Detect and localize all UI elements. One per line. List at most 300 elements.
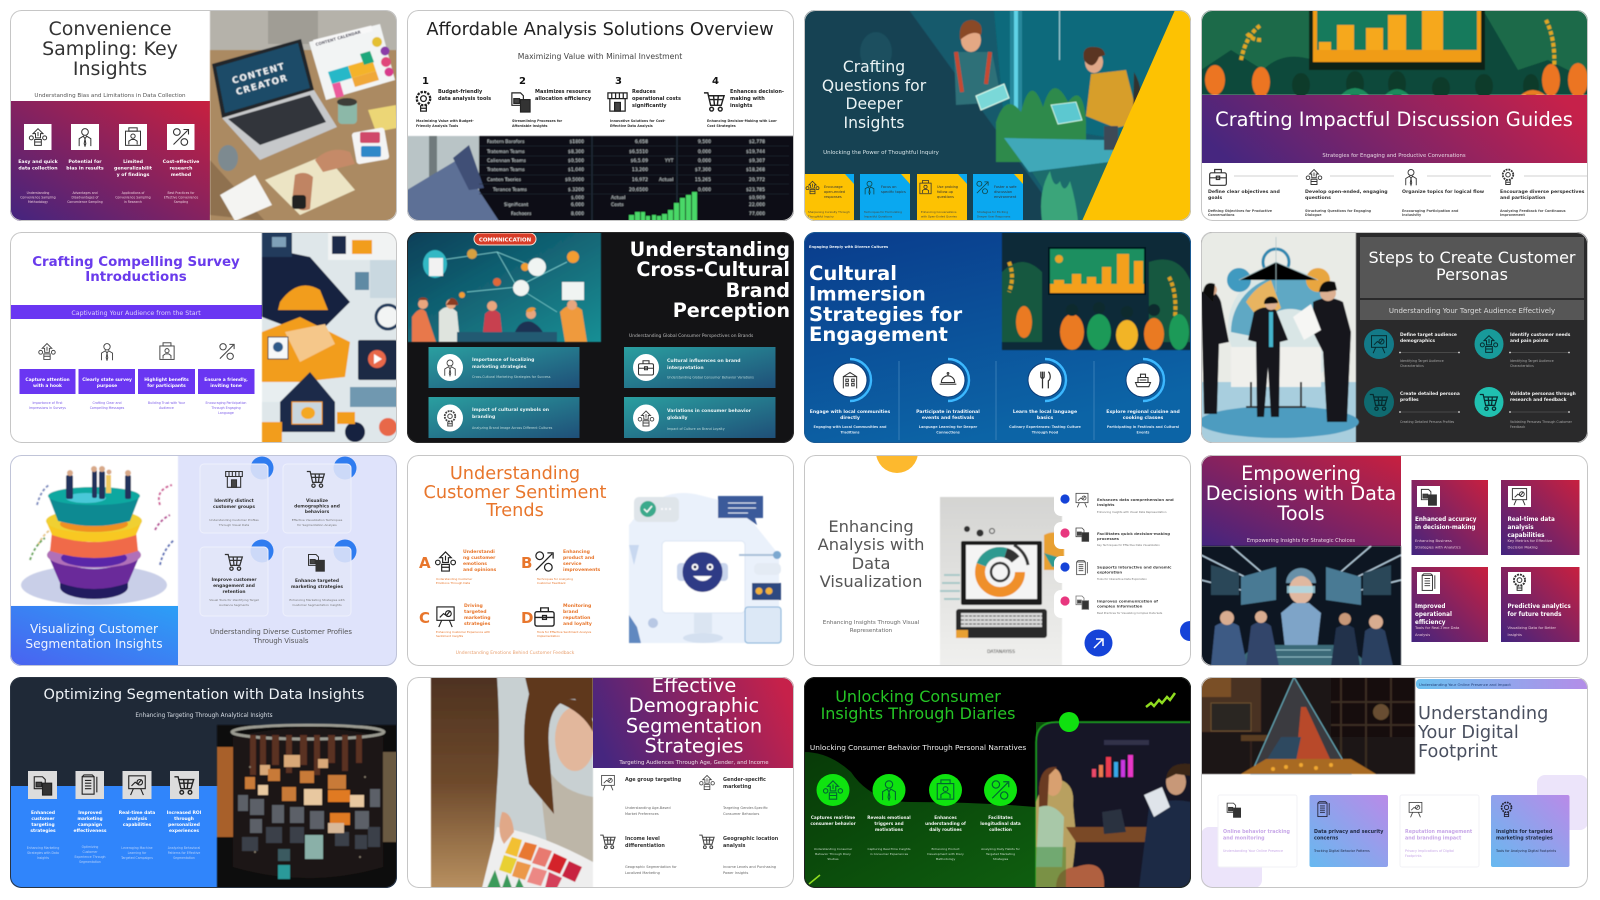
- communication pill: [474, 233, 536, 245]
- title: Insights: [73, 58, 147, 80]
- four segmentation items: analysis: [723, 843, 746, 849]
- four step columns: Learning for: [128, 851, 147, 855]
- four guide items: Improvement: [1500, 213, 1525, 217]
- four segmentation items: Geographic Segmentation for: [625, 865, 677, 869]
- A to D items: Understanding Customer: [436, 577, 473, 581]
- four segmentation items: Targeting Gender-Specific: [722, 806, 768, 810]
- image: financial table with analyst: 6,000: [571, 202, 584, 208]
- numbered steps: 1: [422, 76, 429, 87]
- four segmentation items: Age group targeting: [625, 777, 682, 783]
- four guide items: Conversations: [1208, 213, 1235, 217]
- image: financial table with analyst: 9,500: [698, 139, 711, 145]
- four purple steps: Importance of First: [32, 401, 63, 405]
- gradient title block: Targeting Audiences Through Age, Gender, and Income: [618, 760, 769, 766]
- title: Optimizing Segmentation with Data Insights: [44, 687, 364, 703]
- image: financial table with analyst: $1800: [569, 139, 584, 145]
- A to D items: Customer Feedback: [537, 581, 566, 585]
- four metric cards: Improved: [1415, 604, 1445, 610]
- four metric cards: Visualizing Data for Better: [1508, 626, 1557, 630]
- image: financial table with analyst: 15,265: [695, 177, 711, 183]
- four guide items: Encouraging Participation and: [1402, 209, 1459, 213]
- illustration: layered funnel with people: [10, 455, 178, 606]
- image: financial table with analyst: Fachoors: [511, 211, 532, 217]
- four feature cards: concerns: [1314, 836, 1338, 842]
- title: Understanding: [630, 238, 790, 261]
- image: financial table with analyst: $.3200: [568, 187, 584, 193]
- title: Affordable Analysis Solutions Overview: [426, 19, 774, 40]
- image: financial table with analyst: $,000: [571, 195, 584, 201]
- four green icons: Facilitates: [988, 815, 1013, 820]
- four persona steps: Identifying Target Audience: [1400, 359, 1444, 363]
- A to D items: and loyalty: [563, 621, 592, 627]
- title: Crafting: [843, 58, 905, 76]
- four purple steps: Audience: [159, 406, 174, 410]
- image: financial table with analyst: Actual: [611, 195, 625, 201]
- four feature cards: Privacy Implications of Digital: [1405, 849, 1454, 853]
- four segmentation items: Geographic location: [723, 836, 779, 842]
- four ringed strategies: Language Learning for Deeper: [919, 425, 978, 429]
- four glass cards: Identify distinct: [214, 498, 254, 504]
- four glass cards: marketing strategies: [291, 584, 343, 590]
- four guide items: Analyzing Feedback for Continuous: [1500, 209, 1566, 213]
- image: financial table with analyst: Costs: [611, 202, 624, 208]
- four benefit rows: Best Practices for Visualizing Complex Data Sets: [1097, 611, 1163, 615]
- four glass cards: Visualize: [306, 498, 328, 504]
- A to D items: Sentiment Insights: [436, 634, 464, 638]
- four teal feature cards: Variations in consumer behavior: [667, 408, 752, 414]
- image: financial table with analyst: $23,785: [746, 187, 765, 193]
- A to D items: product and: [563, 555, 594, 561]
- illustration: laptop with donut chart: [940, 497, 1064, 666]
- gradient feature panel: data collection: [18, 166, 58, 172]
- four feature cards: and branding impact: [1405, 836, 1462, 842]
- four metric cards: Tools for Real-Time Data: [1414, 626, 1459, 630]
- image: couple in neon cafe: [1036, 722, 1191, 888]
- illustration: audience and bar chart: [1201, 10, 1588, 99]
- numbered steps: Innovative Solutions for Cost-: [610, 119, 666, 123]
- four ringed strategies: Engaging with Local Communities and: [814, 425, 887, 429]
- A to D items: targeted: [464, 609, 487, 615]
- image: financial table with analyst: Terance Teams: [492, 187, 527, 193]
- image: financial table with analyst: 0,000: [698, 158, 711, 164]
- gradient feature panel: Convenience Sampling: [20, 196, 56, 200]
- four green icons: understanding of: [925, 821, 966, 826]
- four teal feature cards: marketing strategies: [472, 364, 527, 370]
- four tip cards: questions: [937, 195, 954, 199]
- image: financial table with analyst: 13,200: [632, 167, 648, 173]
- A to D items: and opinions: [463, 567, 497, 573]
- card border: [10, 456, 396, 666]
- image: financial table with analyst: $8,300: [568, 149, 584, 155]
- four step columns: analysis: [127, 816, 147, 822]
- numbered steps: Streamlining Processes for: [512, 119, 563, 123]
- four feature cards: marketing strategies: [1496, 836, 1553, 842]
- image: financial table with analyst: Canten Taeries: [487, 177, 522, 183]
- image: financial table with analyst: $2,778: [749, 139, 765, 145]
- image: financial table with analyst: $7,300: [695, 167, 711, 173]
- four step columns: Experience Through: [74, 855, 106, 859]
- gradient feature panel: Potential for: [68, 159, 102, 165]
- numbered steps: significantly: [632, 103, 667, 109]
- gradient feature panel: Methodology: [28, 200, 48, 204]
- four persona steps: Identifying Target Audience: [1510, 359, 1554, 363]
- caption: Understanding Diverse Customer Profiles: [210, 628, 352, 636]
- four persona steps: Define target audience: [1400, 332, 1457, 338]
- A to D items: B: [521, 554, 532, 572]
- four ringed strategies: [810, 359, 1180, 440]
- image: financial table with analyst: $6,5.09: [630, 158, 648, 164]
- numbered steps: Enhancing Decision-Making with Low-: [707, 119, 778, 123]
- numbered steps: Maximizing Value with Budget-: [416, 119, 474, 123]
- gradient title block: Demographic: [629, 694, 759, 717]
- four ringed strategies: Events: [1137, 430, 1149, 434]
- A to D items: improvements: [563, 567, 601, 573]
- four green icons: in Consumer Experiences: [870, 852, 909, 856]
- A to D items: A: [419, 554, 431, 572]
- four guide items: [1208, 170, 1588, 217]
- gradient title band: Strategies for Engaging and Productive Conversations: [1322, 153, 1466, 159]
- title: Cultural: [809, 262, 897, 285]
- panel: Demographic Segmentation: [407, 674, 794, 888]
- gradient title block: [1201, 455, 1401, 546]
- four tip cards: Impactful Questions: [864, 214, 893, 218]
- four metric cards: analysis: [1508, 525, 1534, 531]
- card border: [804, 456, 1190, 666]
- four step columns: Optimizing: [82, 845, 98, 849]
- title: Brand: [726, 279, 790, 302]
- image: financial table with analyst: 0,000: [698, 149, 711, 155]
- four purple steps: Building Trust with Your: [148, 401, 186, 405]
- four persona steps: Identify customer needs: [1510, 332, 1571, 338]
- image: financial table with analyst: 20,6500: [629, 187, 648, 193]
- four glass cards: behaviors: [305, 509, 330, 515]
- gradient title block: Tools: [1276, 502, 1325, 525]
- four guide items: Develop open-ended, engaging: [1305, 189, 1388, 195]
- panel: Customer Personas: [1199, 232, 1588, 443]
- title: Footprint: [1418, 742, 1498, 762]
- gradient feature panel: in Research: [124, 200, 142, 204]
- four green icons: daily routines: [929, 827, 962, 832]
- four benefit rows: Facilitates quick decision-making: [1097, 531, 1170, 536]
- subtitle: Understanding Bias and Limitations in Data Collection: [34, 93, 186, 99]
- gradient feature panel: Limited: [123, 159, 143, 165]
- four glass cards: Through Visual Data: [218, 523, 249, 527]
- four step columns: through: [174, 816, 194, 822]
- image: financial table with analyst: Trateman Teams: [486, 167, 525, 173]
- gradient feature panel: research: [169, 166, 193, 172]
- image: financial table with analyst: $18,268: [746, 167, 765, 173]
- A to D items: D: [521, 609, 533, 627]
- A to D items: Tools for Effective Sentiment Analysis: [536, 630, 592, 634]
- title: Customer Sentiment: [424, 483, 607, 503]
- image: financial table with analyst: $0,909: [749, 195, 765, 201]
- gradient feature panel: bias in results: [66, 166, 104, 172]
- card border: [1202, 232, 1588, 442]
- four persona steps: Characteristics: [1400, 364, 1424, 368]
- four purple steps: inviting tone: [210, 383, 242, 389]
- four ringed strategies: Participating in Festivals and Cultural: [1107, 425, 1179, 429]
- image: financial table with analyst: 16,972: [632, 177, 648, 183]
- gradient feature panel: Understanding: [27, 191, 49, 195]
- image: financial table with analyst: Fastern Barofors: [487, 139, 525, 145]
- four metric cards: Key Metrics for Effective: [1508, 539, 1553, 543]
- gradient feature panel: Easy and quick: [18, 159, 59, 165]
- four step columns: Targeted Campaigns: [120, 856, 153, 860]
- subtitle: Enhancing Targeting Through Analytical Insights: [135, 713, 273, 719]
- four step columns: marketing: [77, 816, 103, 822]
- A to D items: Driving: [464, 603, 483, 609]
- four glass cards: Customer Segmentation Insights: [292, 603, 342, 607]
- image: financial table with analyst: YYT: [664, 158, 674, 164]
- image: financial table with analyst: $19,744: [746, 149, 765, 155]
- photo: content creator desk: CREATOR: [235, 74, 289, 98]
- card border: [408, 456, 794, 666]
- four tip cards: with Open-Ended Queries: [921, 214, 957, 218]
- four ringed strategies: Connections: [936, 430, 960, 434]
- four glass cards: engagement and: [213, 583, 255, 589]
- four green icons: triggers and: [874, 821, 904, 826]
- photo: content creator desk: CONTENT CALENDAR: [315, 29, 361, 47]
- four step columns: targeting: [31, 822, 55, 828]
- four step columns: experiences: [169, 828, 199, 834]
- panel: Optimizing Segmentation: [10, 677, 397, 888]
- four tip cards: Deeper User Responses: [977, 214, 1011, 218]
- four step columns: capabilities: [123, 822, 152, 828]
- four step columns: Strategies with Data: [27, 851, 59, 855]
- four purple steps: with a hook: [33, 383, 62, 389]
- four teal feature cards: interpretation: [667, 365, 704, 371]
- title: Sampling: Key: [42, 38, 178, 60]
- four metric cards: Analysis: [1415, 633, 1430, 637]
- gradient title block: Empowering: [1241, 462, 1361, 485]
- four teal feature cards: Impact of cultural symbols on: [472, 407, 549, 413]
- four segmentation items: Income Levels and Purchasing: [723, 865, 776, 869]
- four segmentation items: Power Insights: [723, 871, 749, 875]
- four ringed strategies: Culinary Experiences: Tasting Culture: [1009, 425, 1082, 429]
- four green icons: Development with Diary: [927, 852, 964, 856]
- four metric cards: Real-time data: [1508, 517, 1555, 523]
- image: financial table with analyst: Caliennan Teams: [487, 158, 527, 164]
- gradient title band: Crafting Impactful Discussion Guides: [1215, 108, 1573, 131]
- subtitle: Unlocking the Power of Thoughtful Inquiry: [823, 150, 940, 156]
- title: Insights: [844, 114, 904, 132]
- four metric cards: efficiency: [1415, 620, 1446, 626]
- four step columns: Insights: [37, 856, 49, 860]
- image: financial table with analyst: $6,5510: [629, 149, 648, 155]
- image: financial table with analyst: $9,307: [749, 158, 765, 164]
- four purple steps: Through Engaging: [210, 406, 241, 410]
- gradient title block: [593, 674, 794, 768]
- four purple steps: Encouraging Participation: [206, 401, 246, 405]
- four glass cards: [200, 456, 356, 616]
- four green icons: Enhances: [934, 815, 957, 820]
- panel: Convenience Sampling: [10, 10, 397, 221]
- four segmentation items: Income level: [625, 836, 660, 842]
- illustration: robot assistant: [629, 493, 781, 643]
- four teal feature cards: globally: [667, 415, 688, 421]
- four benefit rows: Enhancing Insights with Visual Data Representation: [1097, 510, 1167, 514]
- four guide items: questions: [1305, 195, 1331, 201]
- four persona steps: Creating Detailed Persona Profiles: [1400, 420, 1455, 424]
- illustration: forest presentation: [1002, 232, 1191, 350]
- four tip cards: Strategies for Eliciting: [977, 210, 1008, 214]
- title: Data: [852, 554, 890, 573]
- four green icons: Studies: [827, 857, 839, 861]
- four ringed strategies: events and festivals: [922, 415, 974, 421]
- four step columns: Enhanced: [31, 810, 55, 816]
- four segmentation items: [600, 775, 779, 875]
- four feature cards: Footprints: [1405, 854, 1422, 858]
- panel: Affordable Analysis: [407, 10, 794, 221]
- four glass cards: demographics and: [294, 504, 340, 510]
- image: financial table with analyst: 0,000: [698, 187, 711, 193]
- title: Questions for: [822, 77, 927, 95]
- four benefit rows: Key Techniques for Effective Data Visualization: [1097, 543, 1160, 547]
- four tip cards: environment: [994, 195, 1017, 199]
- four teal feature cards: branding: [472, 414, 495, 420]
- four feature cards: Online behavior tracking: [1223, 829, 1291, 835]
- gradient feature panel: Applications of: [122, 191, 145, 195]
- numbered steps: Effective Data Analysis: [610, 124, 653, 128]
- four metric cards: Insights: [1508, 633, 1522, 637]
- footer note: Understanding Emotions Behind Customer Feedback: [456, 650, 575, 656]
- four segmentation items: Localized Marketing: [625, 871, 660, 875]
- four green icons: [810, 774, 1021, 861]
- four teal feature cards: Importance of localizing: [472, 357, 534, 363]
- four persona steps: [1364, 329, 1576, 429]
- numbered steps: Reduces: [632, 89, 656, 95]
- four guide items: Encourage diverse perspectives: [1500, 189, 1585, 195]
- four persona steps: demographics: [1400, 338, 1435, 344]
- caption: Through Visuals: [253, 637, 309, 645]
- numbered steps: insights: [730, 103, 752, 109]
- card border: [1202, 678, 1588, 888]
- title: Understanding: [450, 464, 580, 484]
- top label: Engaging Deeply with Diverse Cultures: [809, 245, 888, 249]
- photo: content creator desk: CONTENT: [231, 62, 286, 87]
- four feature cards: and monitoring: [1223, 836, 1265, 842]
- gradient feature panel: Convenience Sampling: [67, 200, 103, 204]
- four metric cards: Predictive analytics: [1508, 604, 1571, 610]
- four tip cards: Thoughtful Inquiry: [807, 214, 834, 218]
- four teal feature cards: Cultural influences on brand: [667, 358, 741, 364]
- four green icons: Methodology: [936, 857, 955, 861]
- title: Unlocking Consumer: [835, 687, 1001, 706]
- four guide items: Define clear objectives and: [1208, 189, 1280, 195]
- card border: [10, 10, 396, 220]
- illustration: flat design collage: [262, 232, 400, 443]
- gradient feature panel: y of findings: [117, 172, 150, 178]
- panel: Customer Sentiment: [407, 455, 794, 666]
- image: financial table with analyst: 8,000: [571, 211, 584, 217]
- image: illuminated data pyramid in loft: [1201, 677, 1415, 774]
- gradient feature panel: Advantages and: [72, 191, 98, 195]
- four tip cards: Use probing: [937, 185, 958, 189]
- image: financial table with analyst: $1,040: [568, 167, 584, 173]
- four metric cards: Decision Making: [1508, 546, 1538, 550]
- image: financial table with analyst: [407, 136, 794, 221]
- image: financial table with analyst: $0,500: [568, 158, 584, 164]
- A to D items: ng customer: [463, 555, 496, 561]
- title: Crafting Compelling Survey: [32, 255, 240, 270]
- panel: Consumer Diaries: [804, 677, 1191, 888]
- four purple steps: Crafting Clear and: [92, 401, 122, 405]
- card border: [408, 678, 794, 888]
- image: cylinder of data cubes: [217, 725, 397, 888]
- banner: [10, 305, 262, 319]
- four step columns: Segmentation: [79, 860, 101, 864]
- four tip cards: open-ended: [824, 190, 845, 194]
- image: financial table with analyst: 6,658: [635, 139, 648, 145]
- four tip cards: [804, 174, 1023, 221]
- four benefit rows: Enhances data comprehension and: [1097, 497, 1174, 502]
- four teal feature cards: Cross-Cultural Marketing Strategies for Success: [472, 375, 551, 379]
- four glass cards: for Segmentation Analysis: [297, 523, 337, 527]
- A to D items: C: [419, 609, 430, 627]
- panel: Customer Segmentation: [10, 455, 397, 666]
- A to D items: strategies: [464, 621, 491, 627]
- illustration: business people and globe: [1199, 232, 1359, 443]
- yellow accent: [1082, 10, 1191, 221]
- four guide items: and participation: [1500, 195, 1545, 201]
- card border: [804, 232, 1190, 442]
- four metric cards: Enhanced accuracy: [1415, 517, 1477, 523]
- four persona steps: Create detailed persona: [1400, 391, 1460, 397]
- A to D items: marketing: [464, 615, 491, 621]
- title: Trends: [485, 501, 544, 521]
- four ringed strategies: Participate in traditional: [916, 409, 980, 415]
- panel: Crafting Questions: [804, 10, 1191, 221]
- gradient feature panel: Cost-effective: [163, 159, 199, 165]
- four ringed strategies: Learn the local language: [1013, 409, 1077, 415]
- gradient title block: Empowering Insights for Strategic Choices: [1247, 538, 1355, 544]
- image: financial table with analyst: $9,5000: [565, 177, 584, 183]
- blue title block: Visualizing Customer: [30, 622, 159, 636]
- four benefit rows: complex information: [1097, 604, 1143, 608]
- four segmentation items: Gender-specific: [723, 777, 766, 783]
- title: Your Digital: [1417, 723, 1519, 743]
- four green icons: collection: [989, 827, 1012, 832]
- panel: Survey Introductions: [10, 232, 400, 443]
- numbered steps: operational costs: [632, 96, 681, 102]
- panel: Data Visualization: [804, 431, 1200, 666]
- four step columns: personalized: [168, 822, 200, 828]
- illustration: team around network: [407, 232, 601, 342]
- four ringed strategies: Engage with local communities: [810, 409, 891, 415]
- panel: Cross-Cultural Brand Perception: [407, 232, 794, 443]
- four green icons: Reveals emotional: [867, 815, 911, 820]
- four feature cards: Tracking Digital Behavior Patterns: [1313, 849, 1370, 853]
- gradient feature panel: Sampling: [174, 200, 188, 204]
- four tip cards: Sharpening Curiosity Through: [808, 210, 850, 214]
- gradient feature panel: Effective Convenience: [164, 196, 198, 200]
- numbered steps: data analysis tools: [438, 96, 491, 102]
- four benefit rows: Improves communication of: [1097, 598, 1158, 604]
- four tip cards: discussion: [994, 190, 1012, 194]
- four glass cards: Effective Visualization Techniques: [292, 518, 343, 522]
- four guide items: Dialogue: [1305, 213, 1322, 217]
- four benefit rows: Supports interactive and dynamic: [1097, 564, 1172, 570]
- four purple steps: Ensure a friendly,: [204, 377, 248, 383]
- card border: [1202, 10, 1588, 220]
- four green icons: Behavior Through Diary: [815, 852, 851, 856]
- four tip cards: Foster a safe: [994, 185, 1017, 189]
- four step columns: customer: [31, 816, 55, 822]
- gradient feature panel: generalizabilit: [114, 166, 153, 172]
- card border: [10, 232, 396, 442]
- title panel: [1360, 237, 1584, 298]
- A to D items: Understandi: [463, 549, 495, 555]
